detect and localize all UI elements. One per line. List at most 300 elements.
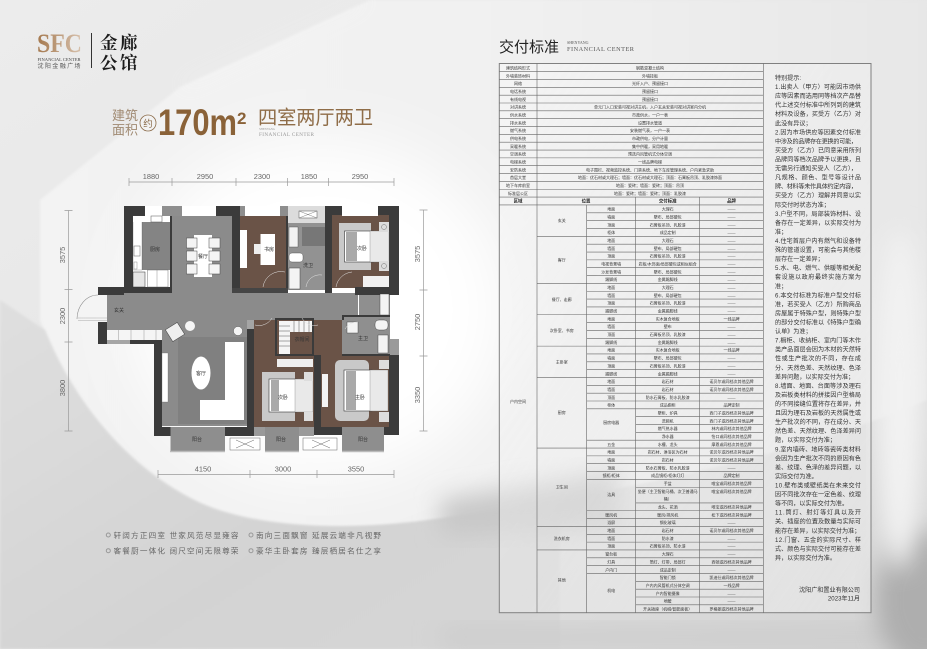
room finish rows: 唯宝或同档次其他品牌 <box>712 480 752 486</box>
special notes: 层存在一定差异； <box>775 255 824 263</box>
special notes: 的不同接缝位置将存在差异，并 <box>775 400 861 408</box>
room finish rows: 五金 <box>607 441 615 447</box>
special notes: 实际交付为准。 <box>775 472 818 480</box>
top dimension bar: 1880 <box>143 172 159 181</box>
room finish rows: —— <box>728 301 736 306</box>
title English: FINANCIAL CENTER <box>567 46 635 53</box>
left dimension bar: 2300 <box>58 308 67 324</box>
special notes: 凡规格、颜色、型号等设计品 <box>775 174 861 182</box>
room finish rows: 岩石材 <box>662 386 674 392</box>
room finish rows: 岩石材 <box>662 527 674 533</box>
area and location labels: 主卧室 <box>556 358 568 364</box>
room finish rows: —— <box>728 293 736 298</box>
room labels: 玄关 <box>114 307 124 314</box>
room finish rows: —— <box>728 544 736 549</box>
special notes: 4.住宅首层户内有燃气和设备特 <box>775 237 861 245</box>
room finish rows: —— <box>728 340 736 345</box>
room finish rows: 金属踢脚线 <box>658 339 678 345</box>
room finish rows: 柜体 <box>607 402 615 408</box>
room labels: 洗卫 <box>303 262 313 269</box>
property system rows: 单元门入口安装可视对讲主机，入户玄关安装可视对讲室内分机 <box>594 104 706 110</box>
special notes: 1.出卖人（甲方）可能因市场供 <box>775 83 861 91</box>
special notes: 且因为理石及岩板的天然属性或 <box>775 409 861 417</box>
property system rows: 钢筋混凝土结构 <box>636 64 664 70</box>
property system rows: 首层大堂 <box>510 174 526 180</box>
bottom dimension bar: 3550 <box>348 464 364 474</box>
property system rows: 一线品牌电梯 <box>638 158 662 164</box>
bottom dimension bar <box>158 464 394 478</box>
room finish rows: 怡口或同档次其他品牌 <box>712 433 752 439</box>
room finish rows: 浴屏 <box>607 519 615 525</box>
property system rows: 电子围栏、视频监控系统、门禁系统、地下车库管理系统、户内紧急求助 <box>586 166 714 172</box>
room finish rows: —— <box>728 371 736 376</box>
room finish rows: 成品橱柜 <box>660 402 676 408</box>
room finish rows <box>601 206 754 612</box>
property system rows: 市政供电，分户计量 <box>632 135 668 141</box>
title: delivery standard <box>499 38 635 56</box>
property system rows <box>506 64 722 196</box>
special notes: 等不同，以实际交付为准。 <box>775 500 848 508</box>
room finish rows: 地面 <box>607 237 615 243</box>
title text: 交付标准 <box>499 38 559 56</box>
left dimension bar: 3800 <box>58 380 67 396</box>
room finish rows: 顶面 <box>607 395 615 400</box>
table header <box>514 198 736 205</box>
room finish rows: 林内或同档次其他品牌 <box>712 425 752 431</box>
room finish rows: 防水石膏板、防水乳胶漆 <box>646 464 690 470</box>
area label: 建筑 <box>112 108 138 123</box>
floors <box>107 215 390 428</box>
logo Chinese name: 沈阳金融广场 <box>38 62 80 70</box>
property system rows: 采暖系统 <box>510 143 526 149</box>
room finish rows: 踢脚线 <box>605 276 617 282</box>
room finish rows: —— <box>728 254 736 259</box>
panel frame <box>499 64 871 613</box>
room finish rows: 净水器 <box>662 433 674 439</box>
room finish rows: 户内智能摄像 <box>656 590 680 596</box>
special notes: 题，以实际交付为准； <box>775 436 836 444</box>
room finish rows: 诺贝尔或同档次其他品牌 <box>710 378 754 384</box>
small English caption: SHENYANG <box>259 127 276 131</box>
top dimension bar: 2950 <box>352 172 368 181</box>
property system rows: 网络 <box>514 80 522 86</box>
area and location labels: 厨房电器 <box>603 419 619 425</box>
feature list <box>106 530 381 556</box>
room finish rows: 地暖 <box>664 598 672 604</box>
room labels <box>114 245 368 443</box>
title English: SHENYANG <box>567 40 589 45</box>
floor plan <box>77 206 399 452</box>
room finish rows: 壁布 <box>664 323 672 329</box>
walls <box>98 206 399 436</box>
room finish rows: 水槽、龙头 <box>658 441 678 447</box>
property system rows: 集中供暖，采用地暖 <box>632 143 668 149</box>
feature text: 豪华主卧套房 臻层栖居名仕之享 <box>256 546 381 556</box>
property system rows: 空调系统 <box>510 151 526 157</box>
room finish rows: —— <box>728 214 736 220</box>
special notes: 10.壁布类或壁纸类在未来交付 <box>775 482 861 490</box>
title English <box>567 40 635 53</box>
room finish rows: 实木复合地板 <box>656 347 680 353</box>
room finish rows: 筒灯、灯带、局部灯 <box>650 558 686 564</box>
room finish rows: 松下或同档次其他品牌 <box>712 511 752 517</box>
special notes: 准； <box>775 282 787 290</box>
room labels: 主卧 <box>355 394 365 401</box>
room finish rows: 顶面 <box>607 363 615 368</box>
room finish rows: —— <box>728 395 736 400</box>
property system rows: 有线电视 <box>510 96 526 102</box>
area and location labels: 厨房 <box>558 409 566 415</box>
property system rows: 市政供水，一户一表 <box>632 112 668 118</box>
special notes: 此没有异议； <box>775 119 812 127</box>
feature text: 南向三面飘窗 延展云端非凡视野 <box>256 530 381 540</box>
room finish rows: 开关插座（机械/智能面板） <box>643 606 692 612</box>
property system rows: 建筑结构形式 <box>506 64 530 70</box>
property system rows: 标准层公区 <box>508 190 528 196</box>
door swings <box>255 272 358 329</box>
room finish rows: 唯宝或同档次其他品牌 <box>712 488 752 494</box>
room finish rows: 踢脚线 <box>605 370 617 376</box>
property system rows: 电梯系统 <box>510 158 526 164</box>
bottom dimension bar: 4150 <box>195 464 211 474</box>
room labels: 厨房 <box>150 246 160 253</box>
special notes: 分、天然色差、天然纹理、色泽 <box>775 364 861 372</box>
room finish rows: 顶面 <box>607 222 615 227</box>
feature text: 轩阔方正四室 世家风范尽显雍容 <box>114 530 239 540</box>
room finish rows: 踢脚线 <box>605 308 617 314</box>
area and location labels: 机电 <box>607 587 615 593</box>
project name: 廊 <box>120 33 138 53</box>
walk-in closet <box>279 321 312 354</box>
room labels: 餐厅 <box>198 253 208 260</box>
room labels: 阳台 <box>192 436 202 443</box>
property system rows: 预选内风管机式分体空调 <box>628 151 672 157</box>
area label <box>112 108 138 138</box>
project name: 金 <box>100 33 118 53</box>
room finish rows: 成品定制 <box>660 229 676 235</box>
room finish rows: 踢脚线 <box>605 339 617 345</box>
room finish rows: 金属踢脚线 <box>658 276 678 282</box>
south bedroom furniture <box>262 359 313 421</box>
room finish rows: 壁柜、炉具 <box>658 410 678 416</box>
room finish rows: 柜体 <box>607 229 615 235</box>
room finish rows: 石膏板吊顶、乳胶漆 <box>650 331 686 337</box>
room finish rows: 顶面 <box>607 254 615 259</box>
area value: 170m <box>158 102 237 143</box>
room finish rows: 防水石膏板、防水乳胶漆 <box>646 394 690 400</box>
room finish rows: 石膏板吊顶、乳胶漆 <box>650 362 686 368</box>
special notes: 关、插座的位置及数量与实际可 <box>775 518 861 526</box>
room finish rows: —— <box>728 356 736 361</box>
logo divider <box>91 33 92 68</box>
area and location labels: 玄关 <box>558 217 566 223</box>
room finish rows: 墙面 <box>607 292 615 298</box>
project name <box>100 33 138 73</box>
layout type: 四室两厅两卫 <box>258 107 373 129</box>
special notes: 异，以实际交付为准。 <box>775 554 836 562</box>
room finish rows: —— <box>728 285 736 290</box>
room finish rows: 一线品牌 <box>724 582 740 588</box>
room finish rows: —— <box>728 536 736 541</box>
property system rows: 预留接口 <box>642 88 658 94</box>
room finish rows: 石膏板吊顶、乳胶漆 <box>650 300 686 306</box>
special notes: 备存在一定差异，以实际交付为 <box>775 219 861 227</box>
project name: 馆 <box>120 53 138 73</box>
master bath fixtures <box>347 294 389 353</box>
room finish rows: 手盆 <box>664 480 672 486</box>
north bathroom fixtures <box>288 206 325 289</box>
approx badge <box>140 115 156 131</box>
special notes: 式、颜色与实际交付可能存在差 <box>775 545 861 553</box>
room finish rows: 沙发背景墙 <box>601 268 621 274</box>
room finish rows: —— <box>728 269 736 274</box>
room finish rows: —— <box>728 591 736 596</box>
top dimension bar: 2300 <box>254 172 270 181</box>
room finish rows: 壁布、局部硬包 <box>654 268 682 274</box>
property system rows: 地面：优石材或大理石；墙面：优石材或大理石；顶面：石膏板吊顶、乳胶漆饰面 <box>578 174 722 180</box>
special notes: 买受方（乙方）理解并同意以实 <box>775 192 861 200</box>
special notes: 套设施以政府最终实施方案为 <box>775 273 861 281</box>
room finish rows: 地面 <box>607 206 615 212</box>
property system rows: 安装燃气表，一户一表 <box>630 127 670 133</box>
small English caption <box>259 127 315 138</box>
special notes: 因不同批次存在一定色差、纹理 <box>775 490 861 498</box>
logo English name: FINANCIAL CENTER <box>38 57 81 62</box>
special notes: 房屋属于特殊户型，则特殊户型 <box>775 309 861 317</box>
room labels: 次卧 <box>357 245 367 252</box>
room finish rows: 成品镜柜/柜体灯灯 <box>651 472 684 478</box>
property system rows: 地下车库前室 <box>506 182 530 188</box>
special notes: 6.本交付标准为标准户型交付标 <box>775 291 861 299</box>
room finish rows: 镜柜/柜体 <box>603 472 620 478</box>
special notes: 12.门窗、五金的实际尺寸、样 <box>775 536 861 544</box>
room finish rows: —— <box>728 246 736 251</box>
area and location labels: 卫生间 <box>556 484 568 490</box>
balconies <box>170 427 384 452</box>
special notes: 2.因为市场供应等因素交付标准 <box>775 128 861 136</box>
room finish rows: 金属踢脚线 <box>658 308 678 314</box>
room finish rows: —— <box>728 308 736 314</box>
bedroom NE furniture <box>339 222 389 287</box>
room finish rows: —— <box>728 520 736 525</box>
logo SFC mark: SFC <box>37 29 82 58</box>
room finish rows: —— <box>728 599 736 604</box>
special notes: 2023年11月 <box>828 594 860 602</box>
right dimension bar: 3575 <box>413 246 422 262</box>
room finish rows: 岩石材、淋浴区为石材 <box>648 449 688 455</box>
room labels: 客厅 <box>196 370 206 377</box>
feature text <box>114 530 381 556</box>
room finish rows: 电视背景墙 <box>601 260 621 266</box>
special notes: 会因为生产批次不同的原因有色 <box>775 454 861 462</box>
room finish rows: 洗碗机 <box>662 417 674 423</box>
right dimension bar: 3350 <box>413 387 422 403</box>
room finish rows: 西顿或同档次其他品牌 <box>712 558 752 564</box>
special notes: 准，若买受人（乙方）所购商品 <box>775 300 861 308</box>
room finish rows: 地面 <box>607 315 615 321</box>
room finish rows: 墙面 <box>607 323 615 329</box>
room finish rows: 顶面 <box>607 332 615 337</box>
approx badge: 约 <box>143 118 153 130</box>
room finish rows: —— <box>728 277 736 282</box>
room finish rows: 暖风机 <box>605 511 617 517</box>
room finish rows: 防水漆 <box>662 535 674 541</box>
special notes: 11.筒灯、射灯等灯具以及开 <box>775 509 861 517</box>
special notes: 5.水、电、燃气、供暖等相关配 <box>775 264 861 272</box>
special notes: 7.橱柜、收纳柜、室内门等木作 <box>775 337 861 345</box>
room finish rows: 钢化玻璃 <box>660 519 676 525</box>
room finish rows: 窗台板 <box>605 551 617 557</box>
area and location labels: 其他 <box>558 576 566 582</box>
table header: 位置 <box>582 198 591 205</box>
room finish rows: —— <box>728 207 736 212</box>
room finish rows: 大理石 <box>662 237 674 243</box>
special notes: 9.室内墙砖、地砖等瓷砖类材料 <box>775 445 861 453</box>
property system rows: 外墙装饰材料 <box>506 72 530 78</box>
area label: 面积 <box>112 122 138 138</box>
room finish rows: —— <box>728 238 736 243</box>
property system rows: 对讲系统 <box>510 104 526 110</box>
special notes: 无需另行通知买受人（乙方）， <box>775 165 857 173</box>
area and location labels: 洁具 <box>607 491 615 497</box>
room finish rows: 诺贝尔或同档次其他品牌 <box>710 456 754 462</box>
room finish rows: 墙面 <box>607 355 615 361</box>
room finish rows: 大理石 <box>662 551 674 557</box>
room labels: 阳台 <box>358 436 368 443</box>
room finish rows: 地面 <box>607 527 615 533</box>
room labels: 书房 <box>264 246 274 253</box>
room finish rows: 罗格朗或同档次其他品牌 <box>710 606 754 612</box>
area and location labels <box>510 217 619 593</box>
right dimension bar <box>413 210 428 431</box>
special notes: 的部分交付标准以《特殊户型确 <box>775 318 861 326</box>
room finish rows: 诺贝尔或同档次其他品牌 <box>710 386 754 392</box>
property system rows: 设置排水管道 <box>638 119 662 125</box>
room finish rows: —— <box>728 324 736 329</box>
kitchen fixtures <box>133 216 170 287</box>
special notes: 沈阳广和置业有限公司 <box>799 586 860 594</box>
bullet icons <box>106 533 253 553</box>
property system rows: 供水系统 <box>510 112 526 118</box>
special notes: 材料及设备，买受方（乙方）对 <box>775 110 861 118</box>
special notes: 差异问题，以实际交付为准； <box>775 373 854 381</box>
room labels: 衣帽间 <box>294 336 310 343</box>
special notes: 特别提示: <box>775 74 801 82</box>
right dimension bar: 2750 <box>413 314 422 330</box>
table header: 区域 <box>514 198 523 204</box>
room finish rows: 一线品牌 <box>724 315 740 321</box>
room finish rows: 墙面 <box>607 214 615 220</box>
small English caption: FINANCIAL CENTER <box>259 132 315 138</box>
property system rows: 排水系统 <box>510 119 526 125</box>
room finish rows: 地面 <box>607 449 615 455</box>
room finish rows: 地面 <box>607 284 615 290</box>
room finish rows: 岩石材 <box>662 456 674 462</box>
room labels: 主卫 <box>358 335 368 342</box>
room finish rows: 西门子或同档次其他品牌 <box>710 417 754 423</box>
room finish rows: 壁布、局部硬包 <box>654 245 682 251</box>
special notes: 3.户型不同，局部装饰材料、设 <box>775 210 861 218</box>
property system rows: 燃气系统 <box>510 127 526 133</box>
left dimension bar <box>58 210 72 431</box>
room finish rows: 石膏板吊顶、防水漆 <box>650 543 686 549</box>
bottom dimension bar: 3000 <box>275 464 291 474</box>
entry door <box>77 295 107 320</box>
special notes: 殊的管道设置，可能会与其他楼 <box>775 246 861 254</box>
room finish rows: 成品定制 <box>660 566 676 572</box>
room finish rows: —— <box>728 567 736 572</box>
area superscript: 2 <box>237 109 246 128</box>
special notes: 然色差、天然纹理、色泽差异问 <box>775 427 861 435</box>
property system rows: 预留接口 <box>642 96 658 102</box>
room finish rows: 墙面 <box>607 245 615 251</box>
area and location labels: 客厅 <box>558 256 566 262</box>
room labels: 阳台 <box>276 436 286 443</box>
logo <box>37 29 138 73</box>
special notes: 品牌同等档次品牌予以更换，且 <box>775 156 861 164</box>
room labels: 次卧 <box>278 394 288 401</box>
room finish rows: 一线品牌 <box>724 347 740 353</box>
room finish rows: —— <box>728 552 736 557</box>
special notes: 性或生产批次的不同，存在成 <box>775 355 861 363</box>
project name: 公 <box>100 53 118 73</box>
room finish rows: 品牌定制 <box>724 402 740 408</box>
room finish rows: 顶面 <box>607 544 615 549</box>
feature text: 客餐厨一体化 阔尺空间无限尊荣 <box>114 546 239 556</box>
special notes: 类产品面层会因为木材的天然特 <box>775 346 861 354</box>
room finish rows: 大理石 <box>662 284 674 290</box>
room finish rows: —— <box>728 222 736 227</box>
study furniture <box>240 230 275 268</box>
table grid <box>499 64 763 613</box>
area and location labels: 户内空间 <box>510 398 526 404</box>
room finish rows: 诺贝尔或同档次其他品牌 <box>710 449 754 455</box>
heading: area <box>112 102 373 143</box>
room finish rows: —— <box>728 363 736 368</box>
property system rows: 地面：瓷砖；墙面：瓷砖；顶面：乳胶漆 <box>614 190 686 196</box>
room finish rows: 石膏板吊顶、乳胶漆 <box>650 221 686 227</box>
room finish rows: 唯宝或同档次其他品牌 <box>712 504 752 510</box>
room finish rows: 墙面 <box>607 535 615 541</box>
special notes: 代上述交付标准中所列到的建筑 <box>775 101 861 109</box>
dining table <box>186 235 220 277</box>
table header: 交付标准 <box>659 198 677 205</box>
special notes: 买受方（乙方）已同意采用所列 <box>775 146 861 154</box>
room finish rows: —— <box>728 262 736 266</box>
area and location labels: 洗衣机房 <box>554 535 570 541</box>
room finish rows: 金属踢脚线 <box>658 370 678 376</box>
property system rows: 光纤入户、预留接口 <box>632 80 668 86</box>
area and location labels: 次卧室、书房 <box>550 327 574 333</box>
room finish rows: 石膏板吊顶、乳胶漆 <box>650 253 686 259</box>
room finish rows: 顶面 <box>607 465 615 470</box>
special notes: 际交付时状态为准； <box>775 201 830 209</box>
room finish rows: 顶面 <box>607 301 615 306</box>
room finish rows: 墙面 <box>607 386 615 392</box>
room finish rows: 岩板/木饰面/局部硬包或相似组合 <box>639 260 697 266</box>
room finish rows: 墙面 <box>607 456 615 462</box>
special notes: 差、纹理、色泽的差异问题，以 <box>775 463 861 471</box>
special notes: 中涉及的品牌存在更换的可能， <box>775 137 857 145</box>
special notes: 认单》为准； <box>775 328 812 336</box>
room finish rows: 坐便（主卫智能马桶、次卫普通马 <box>638 488 698 494</box>
special notes: 8.墙面、地面、台面等涉及理石 <box>775 382 861 390</box>
special notes: 生产批次的不同，存在成分、天 <box>775 418 861 426</box>
room finish rows: 实木复合地板 <box>656 315 680 321</box>
room finish rows: 燃气热水器 <box>658 425 678 431</box>
room finish rows: 岩石材 <box>662 378 674 384</box>
room finish rows: 智能门锁 <box>660 574 676 580</box>
